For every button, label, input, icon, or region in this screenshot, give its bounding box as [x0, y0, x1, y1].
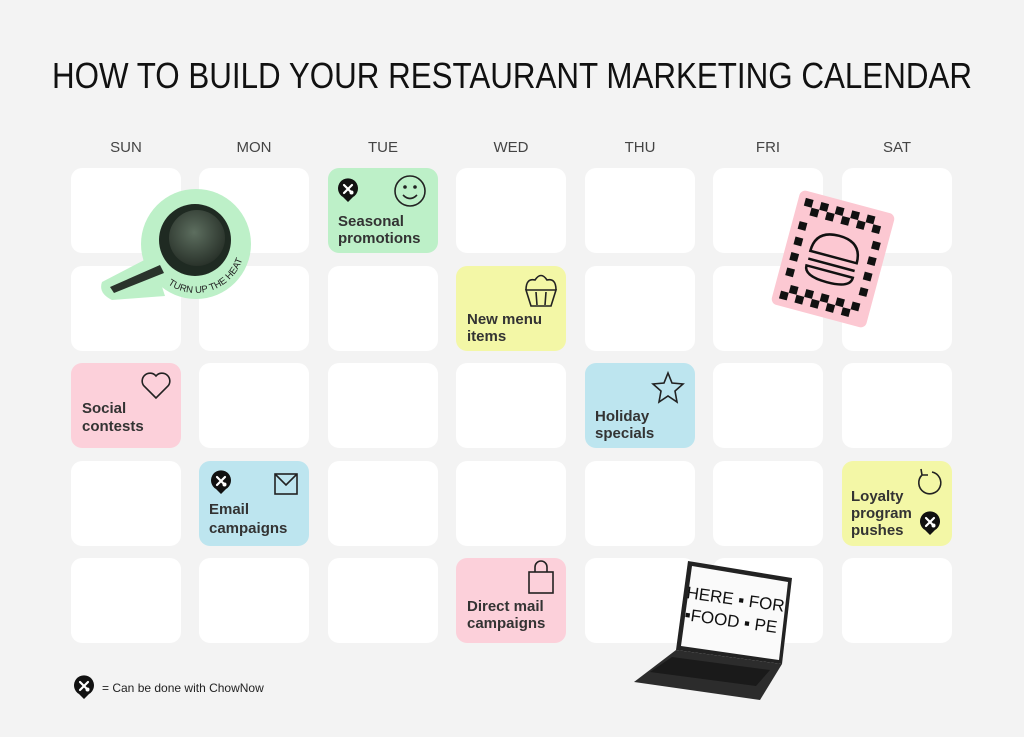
card: seasonal promotions — [338, 176, 425, 247]
icon: smiley — [395, 176, 425, 206]
card: new menu items: items — [467, 328, 506, 345]
day headers — [110, 139, 911, 156]
card: new menu items — [467, 276, 556, 345]
card: email campaigns — [209, 470, 297, 537]
day headers: WED — [494, 139, 529, 156]
icon: shopping bag — [529, 561, 553, 593]
card: loyalty program pushes — [851, 469, 941, 539]
card: social contests: Social — [82, 400, 126, 417]
day headers: THU — [625, 139, 655, 156]
card: loyalty program pushes: program — [851, 505, 912, 522]
day headers: TUE — [368, 139, 398, 156]
laptop — [634, 561, 792, 700]
day headers: SUN — [110, 139, 142, 156]
day headers: SAT — [883, 139, 911, 156]
card: holiday specials: specials — [595, 425, 654, 442]
icon: envelope — [275, 474, 297, 494]
sticker: frying pan: TURN UP THE HEAT — [170, 257, 242, 293]
icon: heart — [142, 373, 170, 398]
card: holiday specials — [595, 373, 683, 442]
day headers: FRI — [756, 139, 780, 156]
card: direct mail campaigns — [467, 561, 553, 632]
card: social contests: contests — [82, 418, 144, 435]
card: social contests — [82, 373, 170, 435]
card: direct mail campaigns: Direct mail — [467, 598, 544, 615]
laptop: ▪FOOD ▪ PE — [683, 605, 778, 637]
card: holiday specials: Holiday — [595, 408, 650, 425]
sticker: burger — [770, 189, 896, 329]
card: new menu items: New menu — [467, 311, 542, 328]
legend: = Can be done with ChowNow — [102, 681, 264, 695]
card: email campaigns: campaigns — [209, 520, 287, 537]
card: direct mail campaigns: campaigns — [467, 615, 545, 632]
card: loyalty program pushes: pushes — [851, 522, 904, 539]
card: loyalty program pushes: Loyalty — [851, 488, 904, 505]
card: email campaigns: Email — [209, 501, 249, 518]
day headers: MON — [236, 139, 272, 156]
calendar grid — [71, 168, 952, 643]
laptop: HERE ▪ FOR — [685, 583, 786, 616]
legend — [74, 675, 264, 699]
card: seasonal promotions: Seasonal — [338, 213, 404, 230]
icon: cupcake — [526, 276, 556, 306]
sticker: frying pan — [101, 189, 251, 300]
icon: star — [653, 373, 683, 402]
icon: refresh — [919, 469, 941, 494]
card: seasonal promotions: promotions — [338, 230, 420, 247]
